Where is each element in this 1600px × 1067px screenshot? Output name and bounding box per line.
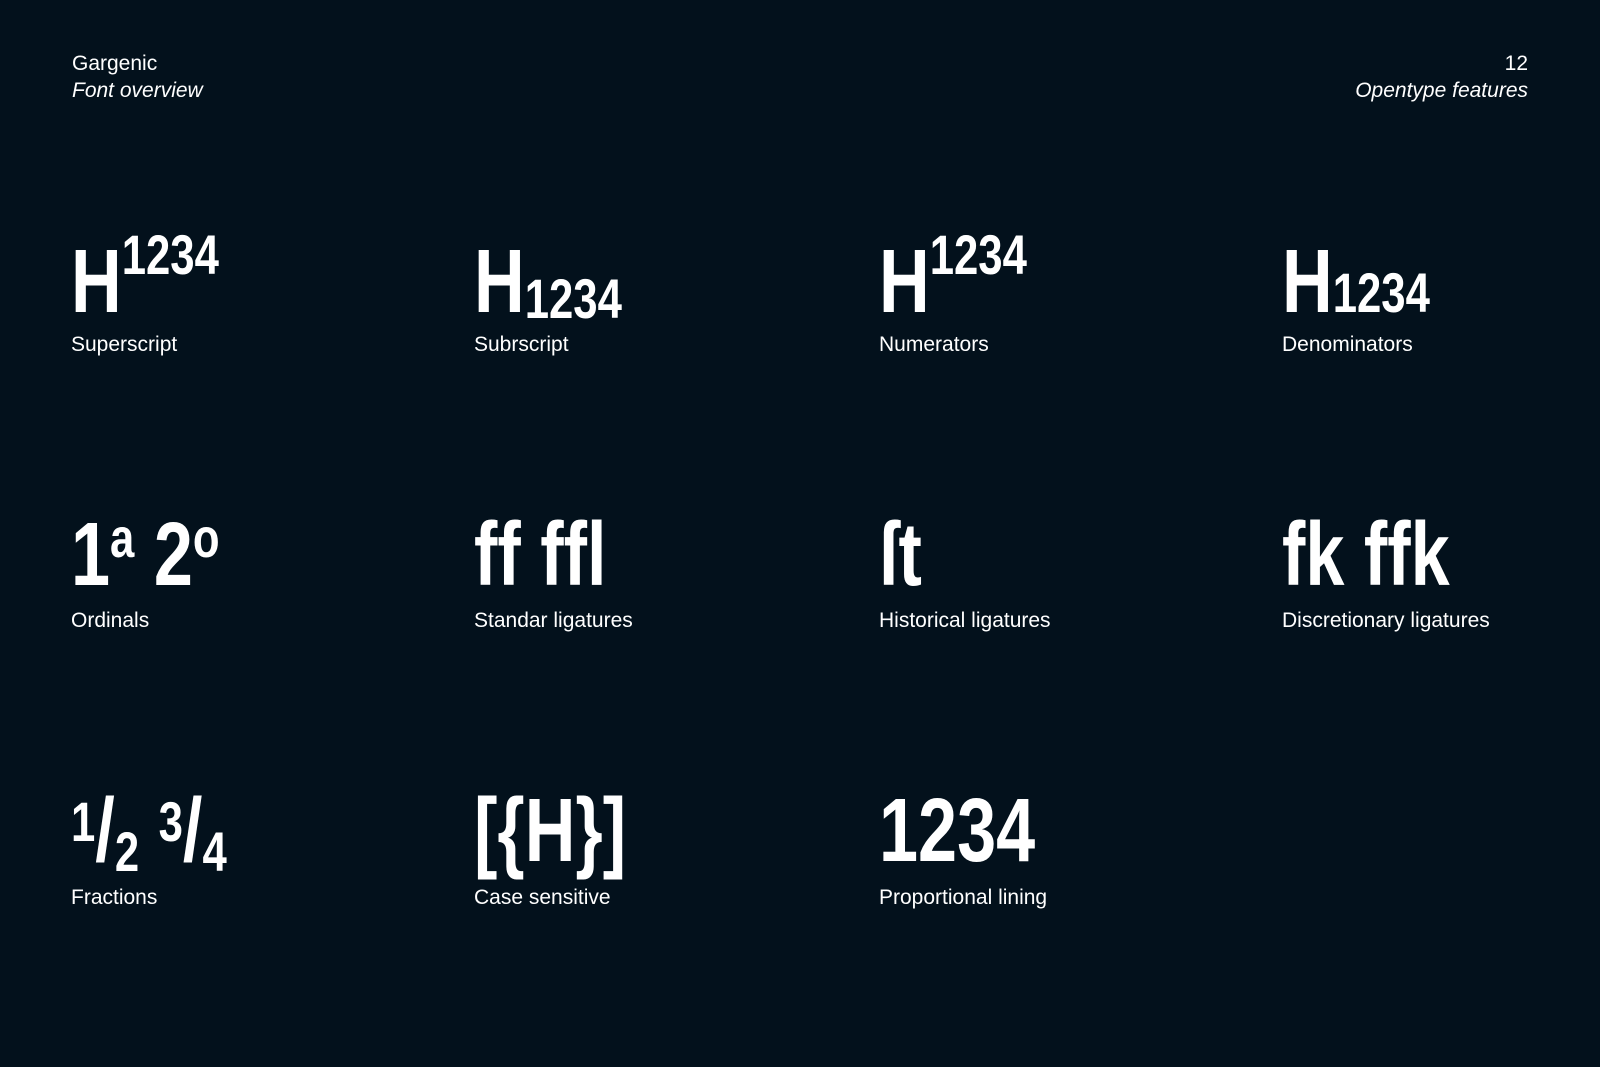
header left: Gargenic — [72, 52, 157, 75]
cell: standard ligatures: Standar ligatures — [474, 609, 633, 632]
cell: historical ligatures: ſt — [879, 505, 922, 605]
cell: subscript: H1234 — [474, 232, 622, 332]
cell: historical ligatures: Historical ligatures — [879, 609, 1051, 632]
cell: standard ligatures — [474, 505, 633, 632]
cell: numerators: H1234 — [879, 223, 1027, 332]
cell: proportional lining: 1234 — [879, 781, 1035, 881]
header right — [1355, 52, 1528, 102]
cell: ordinals: Ordinals — [71, 609, 149, 632]
cell: denominators: Denominators — [1282, 333, 1413, 356]
cell: standard ligatures: ff ffl — [474, 505, 607, 605]
cell: discretionary ligatures — [1282, 505, 1490, 632]
cell: fractions: Fractions — [71, 886, 157, 909]
cell: superscript: Superscript — [71, 333, 177, 356]
cell: discretionary ligatures: Discretionary ligatures — [1282, 609, 1490, 632]
cell: discretionary ligatures: fk ffk — [1282, 505, 1450, 605]
header right: Opentype features — [1355, 79, 1528, 102]
header left: Font overview — [72, 79, 203, 102]
cell: ordinals: 1a 2o — [71, 505, 220, 605]
cell: case sensitive: Case sensitive — [474, 886, 611, 909]
cell: fractions: 1/2 3/4 — [71, 781, 227, 883]
cell: historical ligatures — [879, 505, 1051, 632]
cell: proportional lining: Proportional lining — [879, 886, 1047, 909]
cell: subscript: Subrscript — [474, 333, 569, 356]
cell: denominators: H1234 — [1282, 232, 1430, 332]
cell: numerators: Numerators — [879, 333, 989, 356]
header left — [72, 52, 204, 102]
cell: case sensitive: [{H}] — [474, 781, 626, 881]
header right: 12 — [1505, 52, 1528, 75]
cell: superscript: H1234 — [71, 223, 219, 332]
